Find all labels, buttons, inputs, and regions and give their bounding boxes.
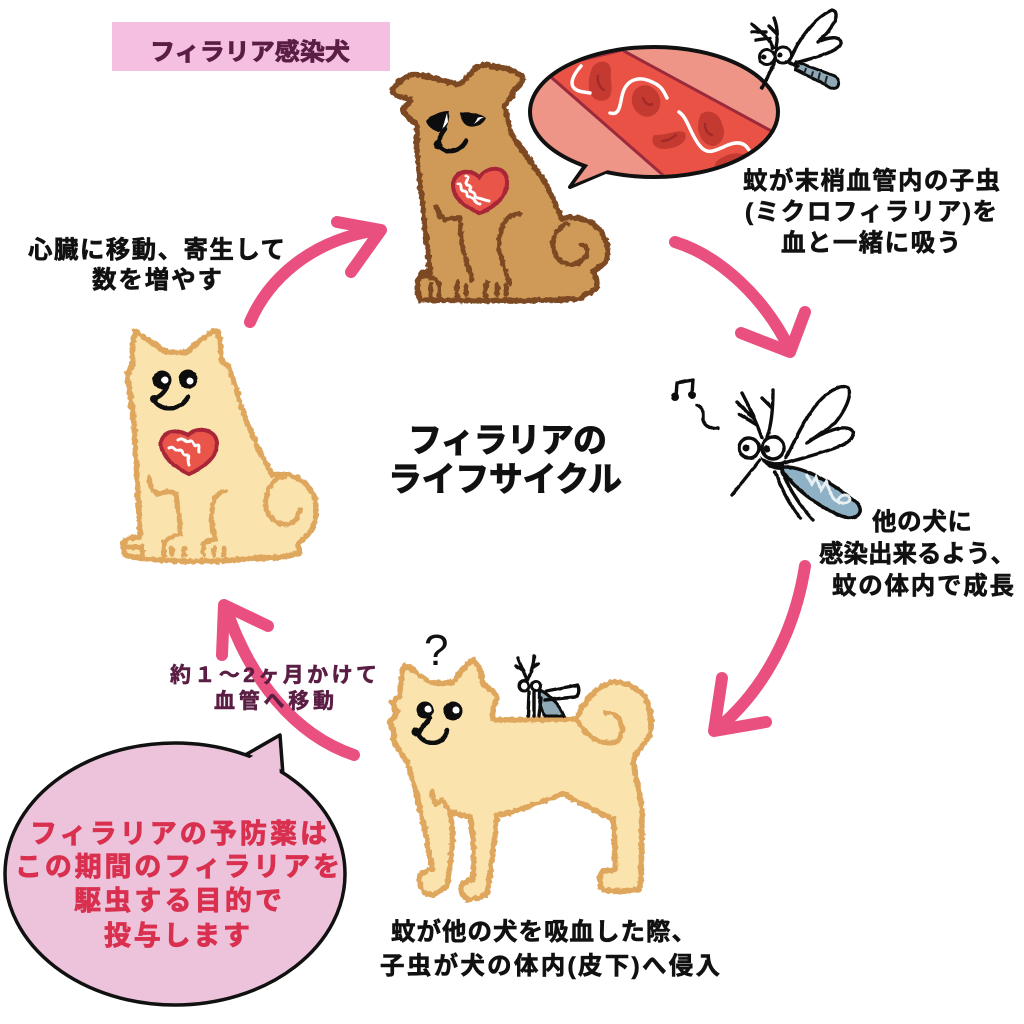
text: larvae enter the dog: 子虫が犬の体内(皮下)へ侵入	[380, 951, 720, 980]
illustration: infected brown dog	[392, 65, 608, 301]
icon: music note and hum	[671, 380, 718, 428]
text: migrates over one to two months: 血管へ移動	[214, 690, 334, 713]
text: moves to heart and multiplies: 心臓に移動、寄生して	[28, 236, 285, 264]
text: moves to heart and multiplies	[28, 236, 285, 294]
speech bubble: blood vessel close-up	[530, 47, 778, 200]
text: migrates over one to two months	[170, 664, 377, 713]
title: ライフサイクル	[388, 461, 622, 499]
title: フィラリアの	[408, 422, 607, 460]
text: larvae enter the dog: 蚊が他の犬を吸血した際、	[391, 917, 696, 946]
text: grows inside the mosquito: 他の犬に	[872, 508, 972, 536]
icon: small mosquito	[752, 10, 841, 88]
text: moves to heart and multiplies: 数を増やす	[92, 266, 222, 294]
heart: sitting dog	[161, 430, 217, 474]
heart: brown dog	[453, 169, 507, 213]
text: larvae enter the dog	[380, 917, 720, 980]
text: mosquito sucks microfilariae	[743, 166, 1000, 257]
illustration: standing dog with mosquito	[390, 626, 651, 899]
callout: preventive medicine: フィラリアの予防薬は	[30, 819, 327, 849]
text: grows inside the mosquito: 蚊の体内で成長	[832, 572, 1014, 600]
text: grows inside the mosquito: 感染出来るよう、	[819, 540, 1015, 568]
text: mosquito sucks microfilariae: 蚊が末梢血管内の子虫	[743, 166, 1000, 195]
arrow: dog to mosquito	[675, 242, 805, 352]
arrow: mosquito to next dog	[714, 566, 805, 731]
label: infected dog	[112, 22, 390, 71]
text: grows inside the mosquito	[819, 508, 1015, 600]
callout: preventive medicine: 駆虫する目的で	[74, 886, 282, 916]
title	[388, 422, 622, 499]
icon: mosquito on the back	[516, 656, 579, 716]
face: sitting dog	[150, 370, 198, 408]
text: mosquito sucks microfilariae: 血と一緒に吸う	[781, 229, 961, 257]
illustration: sitting cream dog	[124, 330, 316, 561]
text: migrates over one to two months: 約１〜2ヶ月かけて	[170, 664, 377, 687]
label: infected dog: フィラリア感染犬	[150, 39, 350, 66]
callout: preventive medicine: 投与します	[104, 921, 250, 951]
face: standing dog	[412, 702, 462, 743]
callout: preventive medicine	[5, 735, 345, 1005]
callout: preventive medicine: この期間のフィラリアを	[15, 852, 340, 882]
icon: large mosquito	[732, 387, 860, 520]
icon: question mark: ?	[424, 626, 448, 675]
blood cells	[588, 62, 744, 166]
arrow: sitting dog to infected dog	[250, 222, 381, 322]
text: mosquito sucks microfilariae: (ミクロフィラリア)を	[745, 198, 997, 226]
arrow: standing dog to sitting dog	[222, 605, 354, 755]
worms	[572, 66, 590, 93]
face: brown dog	[426, 111, 486, 151]
